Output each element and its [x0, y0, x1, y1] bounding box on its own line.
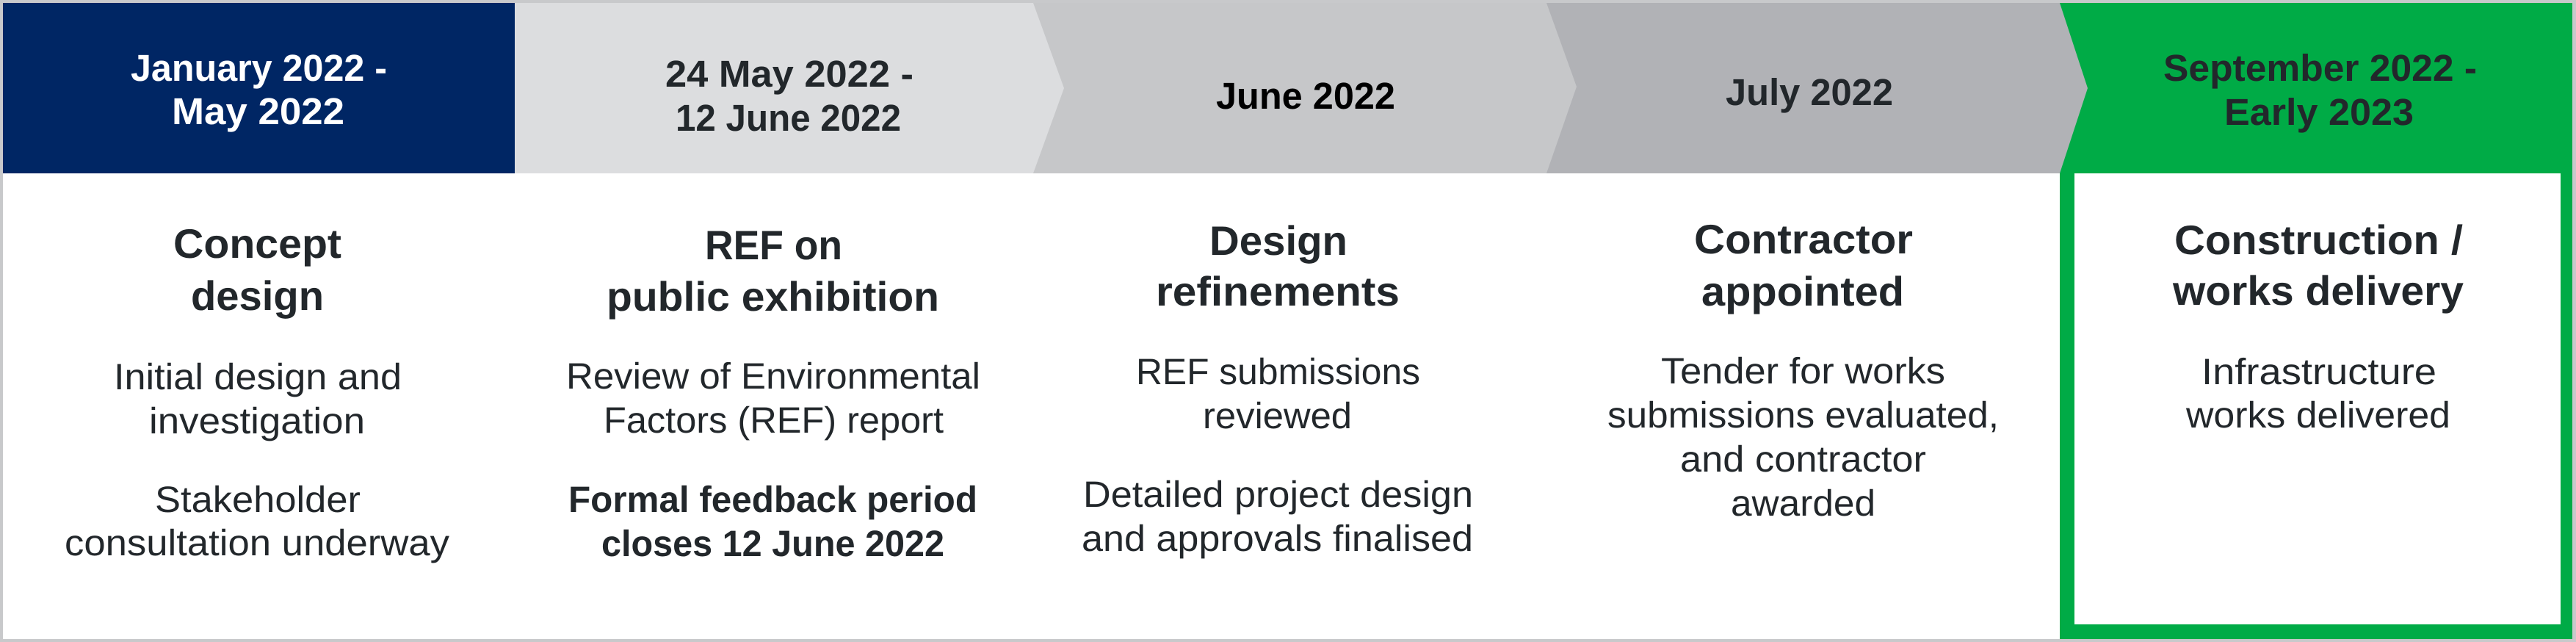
header arrow: 24 May to 12 June 2022	[515, 3, 1064, 173]
heading: concept design: Concept	[173, 220, 341, 267]
heading: contractor appointed	[1694, 216, 1913, 314]
heading: REF on public exhibition: public exhibition	[607, 273, 939, 320]
text: detailed design and approvals: and approvals finalised	[1082, 518, 1473, 559]
text: stakeholder consultation: consultation underway	[65, 522, 449, 563]
header label: September 2022 to Early 2023: Early 2023	[2224, 91, 2414, 133]
heading: construction and works delivery: works delivery	[2172, 267, 2464, 314]
text: detailed design and approvals	[1082, 474, 1473, 559]
text: REF submissions reviewed: REF submissions	[1136, 351, 1420, 392]
heading: REF on public exhibition: REF on	[705, 222, 842, 268]
header arrow: June 2022	[1033, 3, 1577, 173]
text: feedback period closing date: Formal feedback period	[568, 479, 977, 520]
header arrow: 24 May to 12 June 2022: 24 May 2022 -	[665, 53, 913, 95]
text: feedback period closing date	[568, 479, 977, 564]
text: tender evaluation and award: Tender for works	[1661, 350, 1945, 392]
header label: September 2022 to Early 2023	[2163, 47, 2477, 133]
text: review of environmental factors: Review of Environmental	[566, 356, 980, 397]
header arrow: July 2022	[1546, 3, 2088, 173]
header arrow: 24 May to 12 June 2022: 12 June 2022	[676, 97, 901, 139]
text: tender evaluation and award: and contractor	[1680, 439, 1926, 480]
header block: January to May 2022: January 2022 -	[131, 47, 387, 89]
heading: concept design	[173, 220, 341, 319]
text: initial design: investigation	[149, 400, 365, 441]
column: design refinements	[1082, 217, 1473, 559]
heading: construction and works delivery: Construction /	[2174, 217, 2463, 263]
text: infrastructure works delivered	[2185, 351, 2450, 436]
heading: design refinements: Design	[1209, 217, 1347, 264]
text: tender evaluation and award: awarded	[1731, 483, 1875, 524]
text: tender evaluation and award	[1607, 350, 1999, 524]
text: review of environmental factors	[566, 356, 980, 441]
text: REF submissions reviewed	[1136, 351, 1420, 436]
text: tender evaluation and award: submissions evaluated,	[1607, 394, 1999, 436]
header label: September 2022 to Early 2023: September 2022 -	[2163, 47, 2477, 89]
heading: contractor appointed: Contractor	[1694, 216, 1913, 262]
text: infrastructure works delivered: Infrastructure	[2201, 351, 2436, 392]
text: initial design	[114, 356, 402, 441]
text: detailed design and approvals: Detailed project design	[1083, 474, 1473, 515]
text: infrastructure works delivered: works delivered	[2185, 394, 2450, 436]
header arrow: June 2022: June 2022	[1216, 75, 1395, 117]
text: stakeholder consultation	[65, 479, 449, 563]
heading: construction and works delivery	[2172, 217, 2464, 314]
heading: REF on public exhibition	[607, 222, 939, 320]
text: review of environmental factors: Factors (REF) report	[604, 400, 944, 441]
heading: concept design: design	[191, 273, 324, 319]
column: concept design	[65, 220, 449, 563]
text: stakeholder consultation: Stakeholder	[155, 479, 361, 520]
text: REF submissions reviewed: reviewed	[1203, 395, 1352, 436]
column: contractor appointed	[1607, 216, 1999, 524]
text: feedback period closing date: closes 12 June 2022	[601, 523, 944, 564]
column: construction and works delivery	[2172, 217, 2464, 436]
column: REF on public exhibition	[566, 222, 980, 564]
panel: construction highlighted frame	[2060, 3, 2572, 639]
header arrow: July 2022: July 2022	[1726, 71, 1893, 113]
heading: design refinements	[1156, 217, 1400, 314]
heading: design refinements: refinements	[1156, 268, 1400, 314]
text: initial design: Initial design and	[114, 356, 402, 397]
header block: January to May 2022: May 2022	[172, 90, 344, 132]
heading: contractor appointed: appointed	[1701, 268, 1904, 314]
header block: January to May 2022	[3, 3, 515, 173]
